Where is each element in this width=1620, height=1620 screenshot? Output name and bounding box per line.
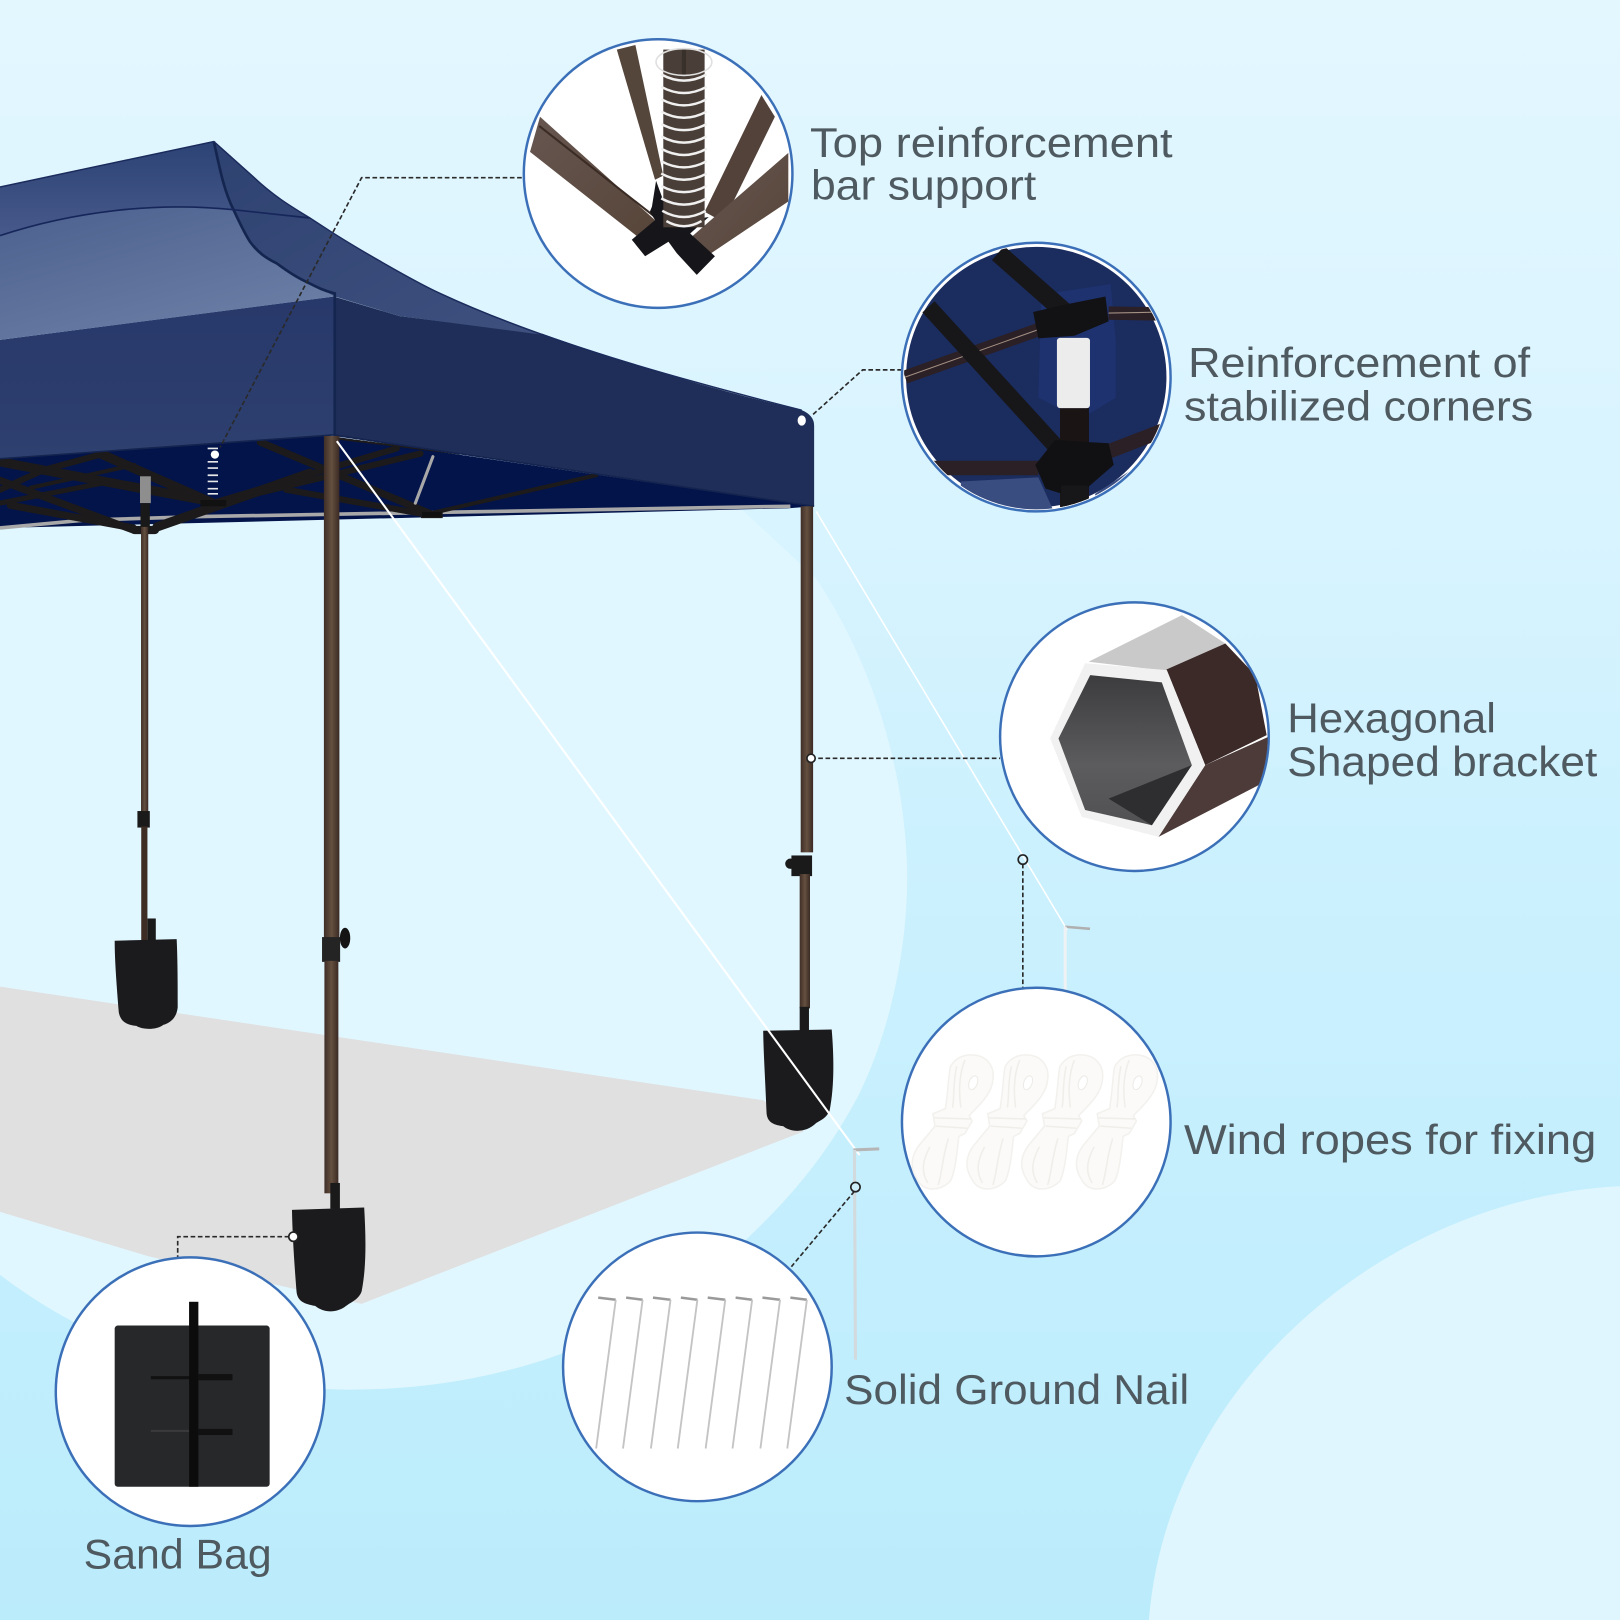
right valance — [334, 297, 814, 506]
right pole with sand bag — [763, 506, 833, 1131]
label: stabilized corners: Reinforcement of — [1188, 340, 1531, 386]
label: hexagonal bracket: Hexagonal — [1287, 696, 1496, 742]
rope coil 4 — [1076, 1055, 1157, 1189]
rope coil 2 — [967, 1055, 1048, 1189]
detail circle: stabilized corners — [902, 243, 1171, 517]
label: stabilized corners — [1184, 340, 1533, 429]
grommet — [798, 415, 806, 426]
roof spring — [200, 448, 226, 506]
label: top reinforcement: bar support — [811, 162, 1037, 208]
upper left roof panel — [0, 142, 233, 236]
canopy underside — [0, 435, 814, 528]
label: top reinforcement: Top reinforcement — [810, 120, 1173, 166]
left valance — [0, 297, 335, 459]
label: hexagonal bracket — [1287, 696, 1598, 785]
rope coil 3 — [1022, 1055, 1103, 1189]
label: top reinforcement — [810, 120, 1173, 208]
leader end dots — [289, 754, 1027, 1241]
detail circle: top reinforcement bar — [524, 39, 792, 308]
detail circle: hexagonal bracket — [1000, 602, 1269, 871]
canopy tent — [0, 142, 814, 530]
wind ropes on tent — [337, 441, 1067, 1155]
grey lower rail — [0, 506, 790, 528]
seams — [214, 142, 335, 436]
right curved roof panel — [214, 142, 542, 335]
label: sand bag: Sand Bag — [84, 1531, 272, 1577]
rope coil 1 — [912, 1055, 993, 1189]
left pole with sand bag — [115, 476, 178, 1029]
detail circle: sand bag — [56, 1257, 324, 1526]
label: ground nail: Solid Ground Nail — [844, 1367, 1189, 1413]
main left roof panel — [0, 207, 335, 340]
label: wind ropes: Wind ropes for fixing — [1184, 1117, 1596, 1163]
detail circle: ground nails — [563, 1233, 832, 1501]
label: stabilized corners: stabilized corners — [1184, 383, 1533, 429]
front pole with sand bag — [292, 436, 365, 1311]
detail circle: wind ropes — [902, 988, 1171, 1256]
ground shadow — [0, 987, 804, 1304]
ground nails on tent — [853, 927, 1090, 1360]
label: hexagonal bracket: Shaped bracket — [1287, 739, 1598, 785]
callout leaders — [178, 178, 1023, 1267]
scissor frame — [0, 438, 596, 530]
